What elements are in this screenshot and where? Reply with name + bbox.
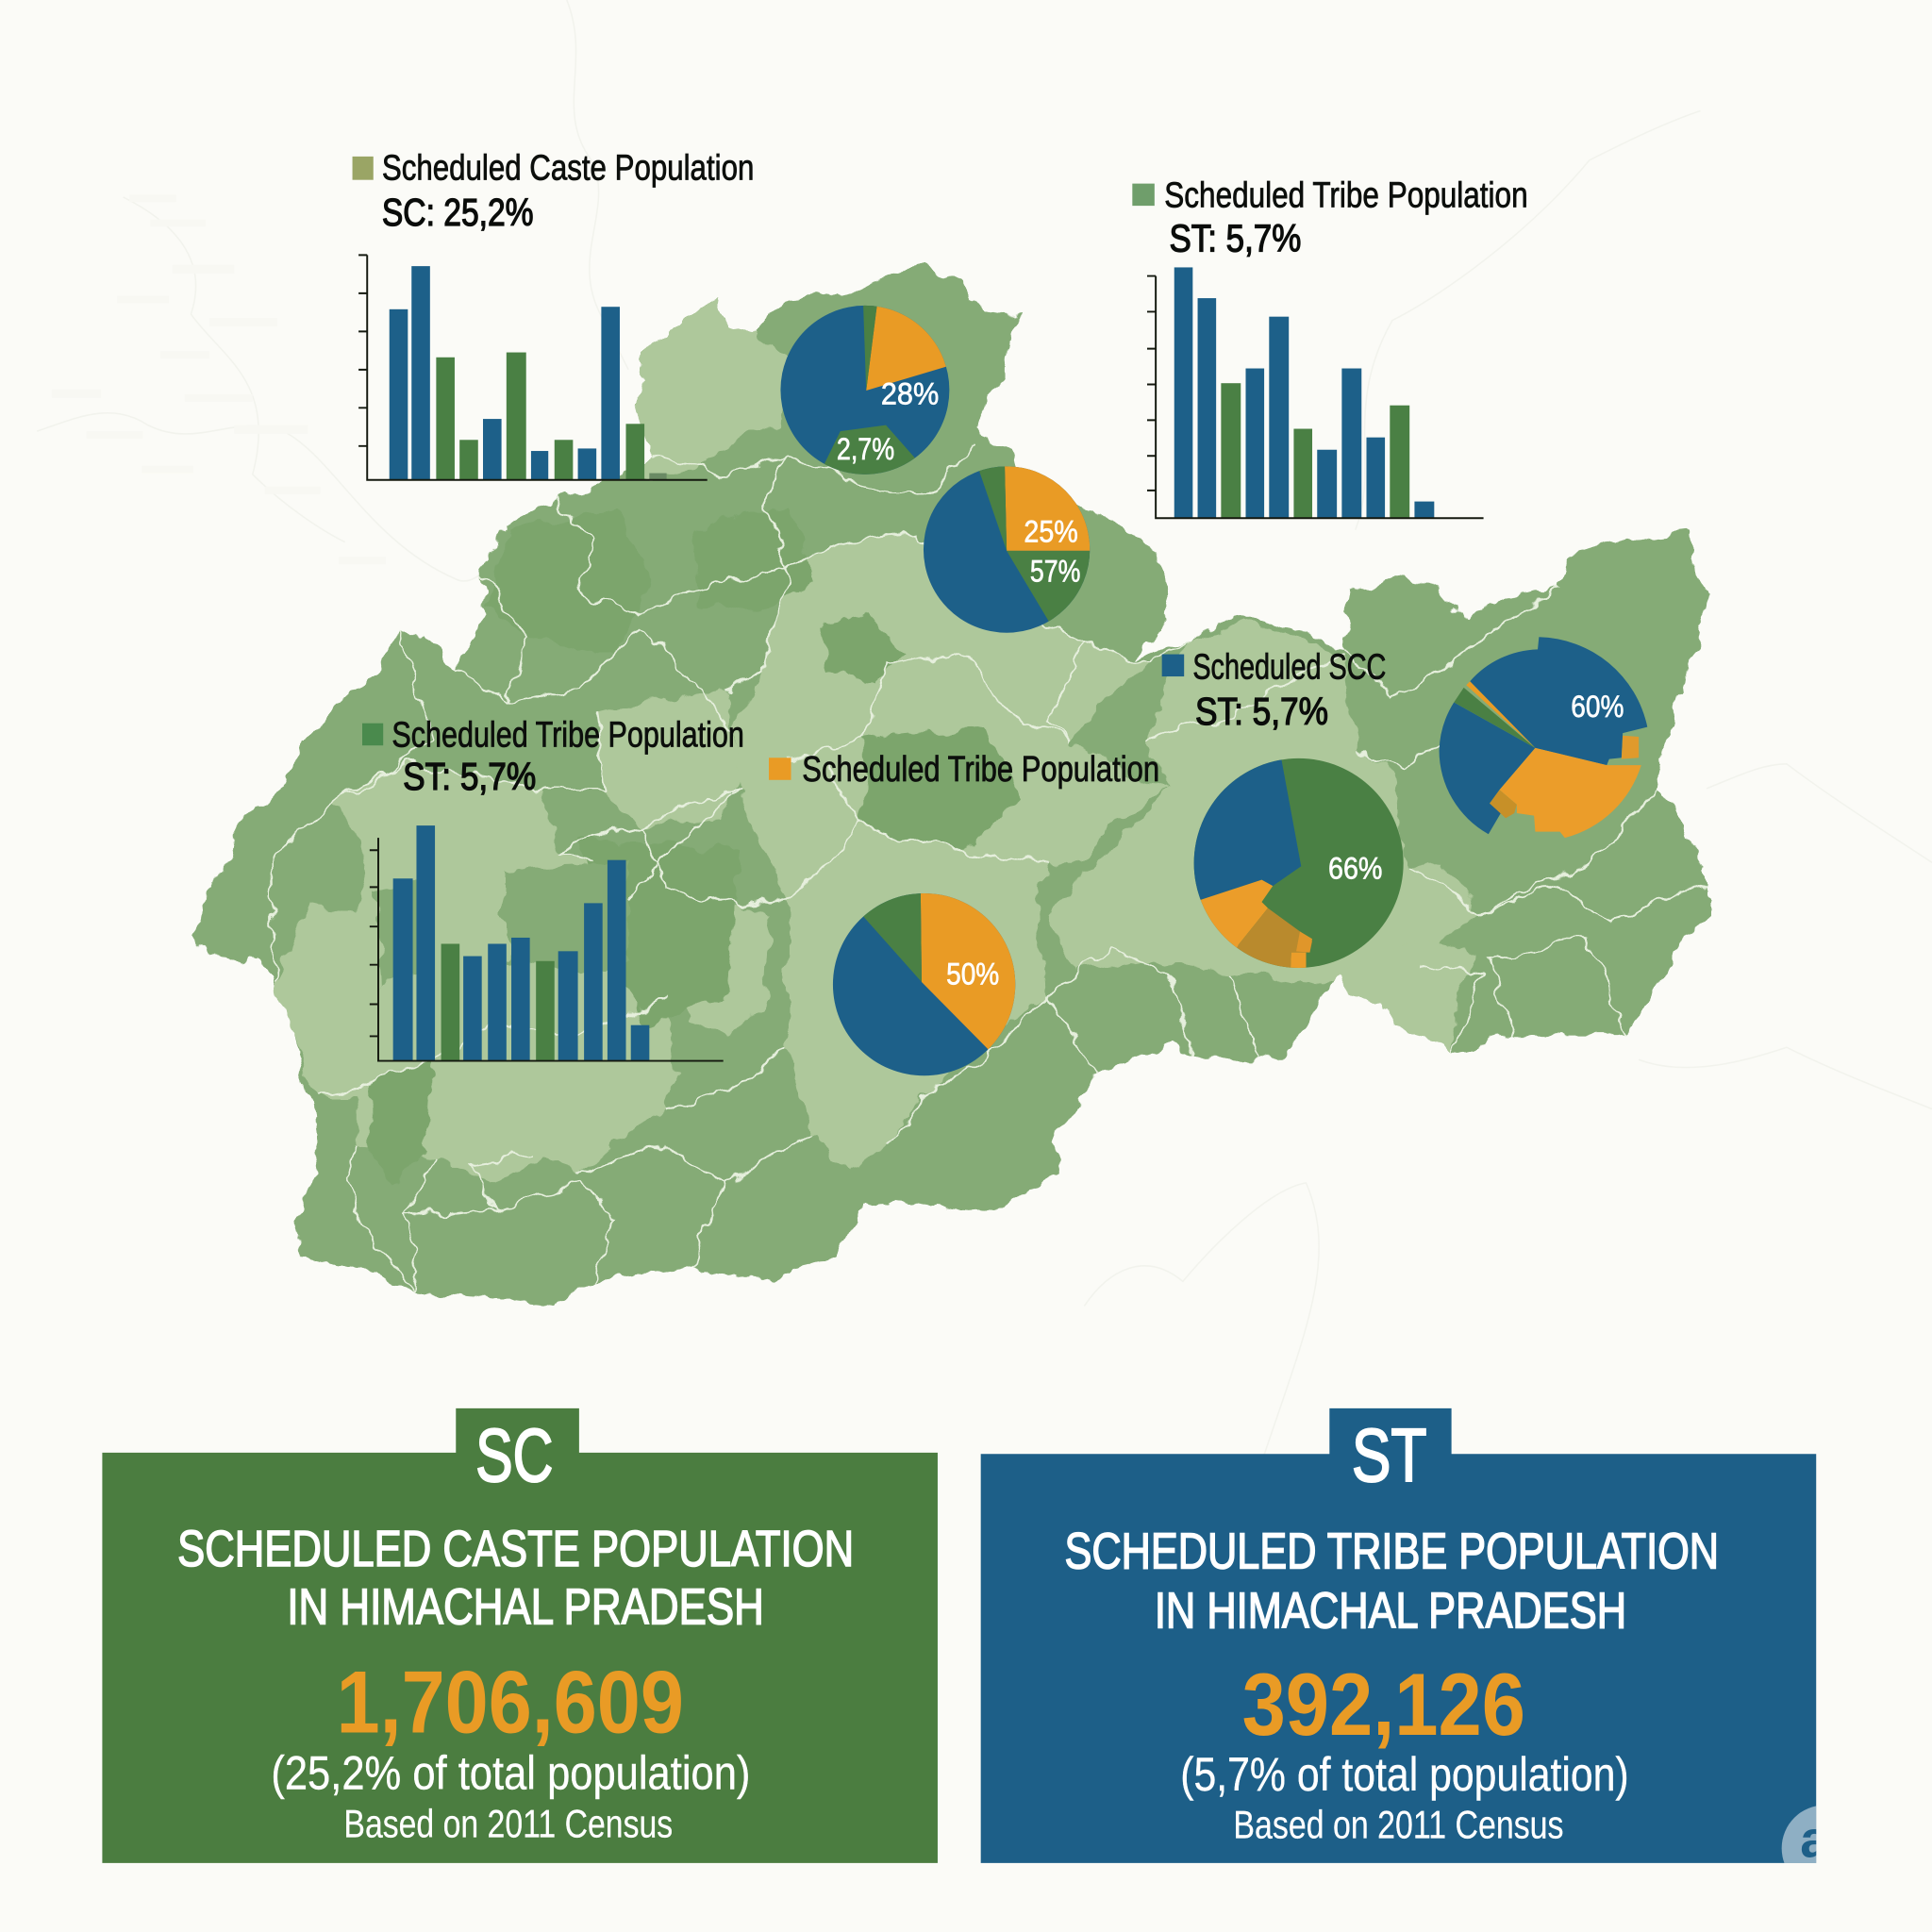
label: 66%: 66% — [1328, 850, 1382, 885]
legend: Scheduled Caste Population — [353, 149, 754, 234]
bar chart: Scheduled Tribe (left) — [370, 825, 724, 1061]
label: 60%: 60% — [1571, 689, 1624, 724]
heading: Scheduled Caste Population in Himachal Pradesh: IN HIMACHAL PRADESH — [287, 1579, 764, 1635]
heading: Scheduled Caste Population in Himachal Pradesh — [177, 1522, 854, 1635]
watermark badge — [1781, 1806, 1817, 1863]
legend: Scheduled SCC: Scheduled SCC — [1192, 648, 1386, 688]
number: 1,706,609: 1,706,609 — [337, 1652, 684, 1751]
source note: Based on 2011 Census — [343, 1801, 673, 1845]
panel: Scheduled Caste summary — [102, 1408, 938, 1863]
legend: Scheduled SCC — [1162, 648, 1386, 733]
tab label: ST: ST — [1352, 1413, 1426, 1497]
pie chart: east — [1440, 637, 1647, 838]
heading: Scheduled Tribe Population in Himachal Pradesh: SCHEDULED TRIBE POPULATION — [1064, 1524, 1719, 1580]
pie chart: north-east — [923, 466, 1091, 633]
pie chart: north — [780, 306, 949, 475]
heading: Scheduled Caste Population in Himachal Pradesh: SCHEDULED CASTE POPULATION — [177, 1522, 854, 1577]
legend: Scheduled Caste Population: SC: 25,2% — [382, 191, 534, 234]
source note: Based on 2011 Census — [1233, 1803, 1563, 1847]
pie chart: centre-south — [832, 893, 1015, 1075]
legend: Scheduled Tribe Population left: ST: 5,7% — [403, 755, 536, 798]
share of total population: (5,7% of total population) — [1180, 1748, 1629, 1801]
label: 50%: 50% — [946, 957, 999, 991]
heading: Scheduled Tribe Population in Himachal Pradesh: IN HIMACHAL PRADESH — [1155, 1583, 1626, 1639]
map of Himachal Pradesh — [193, 265, 1709, 1306]
bar chart: Scheduled Tribe (top right) — [1147, 267, 1484, 518]
legend: Scheduled Tribe Population left — [362, 716, 744, 798]
panel: Scheduled Tribe summary — [981, 1408, 1816, 1863]
legend: Scheduled Tribe Population left: Scheduled Tribe Population — [391, 716, 744, 756]
label: 25%: 25% — [1024, 514, 1078, 549]
label: 57%: 57% — [1030, 553, 1080, 588]
legend: Scheduled Tribe Population top right: ST: 5,7% — [1170, 216, 1301, 259]
heading: Scheduled Tribe Population in Himachal Pradesh — [1064, 1524, 1719, 1639]
bar chart: Scheduled Caste — [358, 255, 708, 480]
legend: Scheduled Tribe Population top right: Scheduled Tribe Population — [1164, 175, 1528, 215]
tab label: SC: SC — [475, 1413, 553, 1497]
legend: Scheduled SCC: ST: 5,7% — [1195, 690, 1328, 733]
legend: Scheduled Caste Population: Scheduled Caste Population — [382, 149, 754, 189]
watermark badge: a — [1800, 1809, 1829, 1868]
number: 392,126: 392,126 — [1242, 1655, 1525, 1754]
share of total population: (25,2% of total population) — [271, 1746, 750, 1799]
legend: Scheduled Tribe Population top right — [1132, 175, 1528, 259]
label: 2,7%: 2,7% — [837, 431, 894, 466]
legend: Scheduled Tribe Population centre: Scheduled Tribe Population — [802, 750, 1159, 790]
label: 28%: 28% — [881, 375, 939, 410]
pie chart: east-centre — [1194, 758, 1404, 968]
